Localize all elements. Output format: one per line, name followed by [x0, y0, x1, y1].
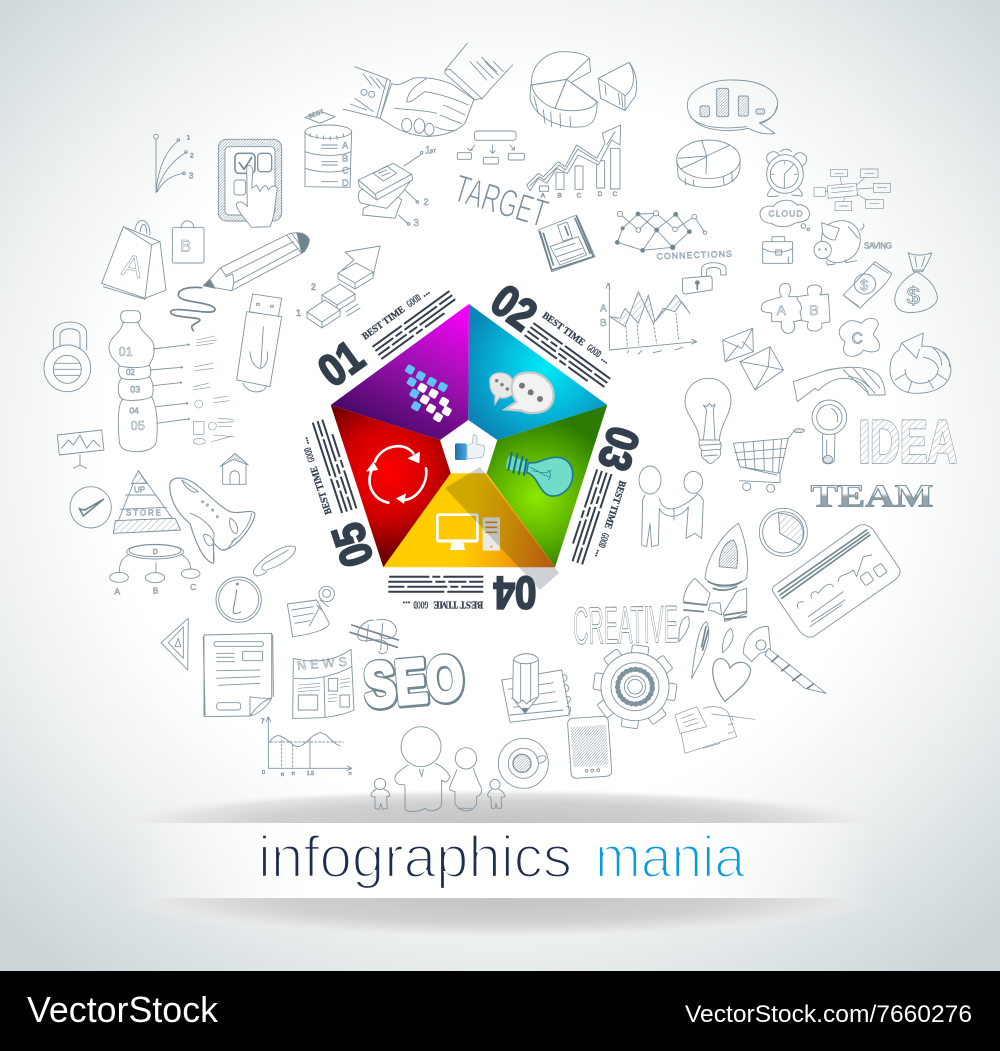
long shadow on segment 04: [445, 467, 559, 590]
sketch: tree diagram: [110, 544, 200, 597]
sketch: cloud label: CLOUD: [768, 209, 803, 219]
sketch: puzzle pieces: B: [809, 302, 819, 318]
sketch: tree diagram: B: [153, 585, 159, 595]
sketch: USB stick: [237, 294, 282, 392]
sketch: notebook with pencil: [502, 654, 571, 722]
sketch: book stack: 1: [425, 144, 431, 156]
sketch: bottle diagram: 03: [130, 385, 140, 395]
sketch: dollar bill: [843, 262, 892, 308]
icon: thumbs up: [455, 435, 485, 460]
sketch: floppy disk: [538, 215, 595, 272]
sketch: data stack: A: [342, 140, 349, 150]
sketch: shopping bag A: [102, 221, 166, 299]
title: infographics mania: mania: [595, 825, 746, 890]
sketch: shopping bag B: [172, 221, 204, 263]
sketch: open lock: [682, 263, 726, 294]
sketch: area line chart: [600, 283, 697, 354]
step 04: number and text: GOOD: [413, 599, 428, 610]
sketch: tablet with touch hand: [218, 139, 282, 227]
sketch: pinned note: [287, 586, 334, 637]
sketches: lower right: [639, 333, 957, 753]
step 03: number and text: GOOD: [596, 531, 611, 549]
sketch: pie icon: [759, 508, 807, 556]
sketch: curved arrow: [793, 367, 885, 402]
step 05: number and text: BEST TIME: [309, 465, 335, 516]
step 03: number and text: BEST TIME: [602, 479, 628, 530]
sketch: padlock: [44, 322, 91, 392]
sketch: pyramid: [113, 471, 181, 533]
step 03: number and text: 03: [588, 421, 650, 477]
sketch: stacked steps with arrow: 2: [311, 282, 316, 292]
sketch: presentation board: [57, 430, 104, 468]
step 01: number and text: GOOD: [405, 292, 423, 310]
sketch: area line chart: B: [600, 318, 607, 329]
sketch: tree diagram: A: [114, 587, 120, 597]
step 05: number and text: GOOD: [302, 446, 318, 463]
sketch: necktie: [743, 627, 826, 693]
sketch: light bulb: [685, 378, 731, 463]
sketch: pencil: [203, 233, 309, 291]
sketch: coffee cup: [498, 738, 548, 788]
sketch: rising arrow bar chart: D: [598, 191, 603, 198]
icon: dot grid: [404, 364, 452, 423]
sketch: family figures: [371, 727, 505, 811]
sketch: small org chart: [457, 131, 524, 164]
step 01: number and text: ...: [419, 286, 432, 300]
sketch: branching curves: 1: [187, 134, 191, 141]
sketch: flat pie chart: [677, 140, 740, 188]
step 03: number and text: [568, 421, 650, 570]
sketch: rocket plane: [170, 478, 255, 563]
title: infographics mania: [258, 825, 746, 890]
sketch: math graph: [261, 716, 352, 778]
sketches: upper left: [44, 134, 309, 468]
sketch: pyramid: STORE: [126, 508, 161, 517]
step 05: number and text: [296, 418, 383, 573]
title ribbon: [125, 823, 875, 898]
sketch: bottle diagram: 05: [131, 419, 145, 433]
sketch: shopping bag B: B: [180, 237, 191, 256]
sketch: document page: [203, 633, 273, 717]
sketch: check mark badge: [70, 487, 111, 528]
sketch: handshake: [343, 43, 513, 136]
sketch: book stack: 2: [423, 197, 429, 207]
sketch: math graph: π: [281, 772, 285, 778]
sketch: cloud label: [760, 200, 810, 231]
step 03: number and text: ...: [592, 549, 605, 560]
sketch: tree diagram: D: [153, 547, 158, 556]
sketch: struck-out dollar: [350, 619, 398, 654]
sketch: SEO outlined word: SEO: [361, 643, 466, 721]
sketch: math graph: n: [349, 771, 352, 777]
step 04: number and text: ...: [402, 599, 410, 610]
sketch: book stack: ST: [430, 149, 436, 154]
sketch: bottle diagram: 04: [129, 405, 139, 415]
sketch: data stack: [305, 109, 352, 188]
sketch: piggy bank: [814, 221, 892, 265]
sketch: alarm clock: [767, 149, 807, 197]
sketches: bottom centre: [350, 595, 682, 811]
sketch: rising arrow bar chart: C: [577, 193, 582, 200]
sketch: newspaper: NEWS: [296, 655, 347, 673]
step 01: number and text: 01: [309, 330, 373, 396]
sketch: math graph: π: [291, 771, 295, 777]
sketch: math graph: 0: [262, 770, 265, 776]
ribbon shadow: top: [160, 791, 839, 823]
sketch: data stack: BEST: [308, 109, 325, 120]
sketch: rising arrow bar chart: A: [541, 193, 546, 200]
sketches: top centre: [305, 43, 637, 272]
sketch: rising arrow bar chart: [527, 125, 621, 200]
sketch: data stack: D: [342, 178, 349, 188]
sketch: piggy bank: SAVING: [864, 241, 892, 250]
sketch: credit card: [773, 525, 900, 637]
sketch: stacked steps with arrow: 1: [296, 308, 301, 318]
icon: cycle arrows: [366, 446, 426, 504]
step 05: number and text: 05: [321, 517, 383, 573]
sketch: shopping cart: [733, 429, 804, 492]
sketch: tree diagram: C: [190, 582, 196, 592]
sketch: gear: [588, 640, 682, 733]
step 02: number and text: [482, 274, 621, 391]
step 01: number and text: BEST TIME: [360, 304, 407, 342]
step 02: number and text: GOOD: [584, 343, 603, 360]
sketch: TEAM shaded word: TEAM: [811, 479, 933, 514]
sketch: IDEA hatched word: IDEA: [859, 409, 957, 476]
sketch: house: [220, 453, 248, 484]
segment 04: yellow: [383, 473, 555, 567]
step 04: number and text: BEST TIME: [433, 599, 483, 610]
sketch: puzzle pieces: C: [852, 330, 863, 347]
text: CREATIVE: [573, 595, 679, 656]
icon: light bulb: [506, 453, 573, 496]
ribbon shadow: bottom: [184, 898, 816, 934]
sketch: bottle diagram: [109, 311, 234, 452]
segment 02: blue: [468, 304, 607, 440]
sketches: lower left: [70, 453, 354, 778]
sketch: rising arrow bar chart: B: [557, 193, 562, 200]
sketch: connections network: [615, 211, 732, 261]
sketch: math graph: 1.5: [307, 771, 314, 777]
sketch: rocket: [679, 523, 748, 678]
sketch: IDEA hatched word: IDEA: [859, 409, 957, 476]
sketch: bottle diagram: 02: [126, 368, 135, 377]
sketch: data stack: C: [342, 165, 349, 175]
sketch: paperclip: [254, 546, 295, 576]
sketch: magnifying glass: [812, 400, 847, 464]
sketch: SEO outlined word: SEO: [362, 644, 467, 721]
sketch: pyramid: UP: [134, 486, 145, 495]
footer: VectorStock logo: VectorStock: [27, 989, 219, 1030]
sketch: folder, notes and pen: [675, 707, 755, 753]
step 02: number and text: 02: [482, 274, 546, 340]
sketch: IDEA hatched word: [859, 409, 957, 476]
footer bar: [0, 971, 1000, 1051]
sketch: book stack: 3: [413, 218, 419, 229]
sketch: puzzle pieces: A: [777, 302, 787, 318]
sketch: heart: [713, 659, 751, 702]
step 02: number and text: BEST TIME: [540, 310, 587, 349]
sketch: TARGET word: TARGET: [449, 167, 553, 236]
icon: speech bubbles: [490, 373, 554, 413]
sketch: area line chart: A: [600, 304, 607, 315]
central pentagon: [331, 304, 607, 590]
footer: image URL: VectorStock.com/7660276: [685, 1001, 972, 1028]
sketch: branching curves: 2: [190, 152, 194, 159]
sketches: upper right: [600, 80, 937, 390]
sketch: math graph: 7: [261, 716, 265, 725]
title: infographics mania: infographics: [258, 825, 572, 890]
sketch: puzzle pieces: [761, 283, 879, 356]
sketch: triangle ruler: [161, 618, 188, 670]
step 04: number and text: [388, 567, 536, 618]
sketch: circular arrow: [890, 333, 951, 393]
sketch: info circle: [216, 577, 261, 622]
icon: desktop computer: [436, 513, 500, 551]
step 04: number and text: 04: [494, 567, 536, 618]
sketch: newspaper: [293, 649, 354, 718]
sketch: smartphone: [567, 716, 612, 779]
sketch: 3D pie chart: [530, 52, 637, 127]
sketch: dollar bill: $: [860, 278, 868, 294]
step 02: number and text: ...: [599, 353, 612, 367]
sketch: two figures shaking hands: [639, 466, 703, 547]
sketch: scribble line: [171, 287, 215, 331]
sketch: book stack: [358, 144, 436, 229]
sketch: rising arrow bar chart: C: [613, 191, 618, 198]
sketch: data stack: B: [342, 154, 348, 164]
sketch: envelopes: [723, 328, 783, 390]
sketch: branching curves: 3: [189, 171, 194, 181]
sketch: money bag: $: [907, 283, 920, 310]
segment 03: green: [487, 405, 607, 567]
sketch: money bag: [895, 253, 937, 313]
step 01: number and text: [309, 277, 458, 396]
sketch: speech bubble with bars: [687, 80, 778, 134]
sketch: stacked steps with arrow: [296, 246, 380, 328]
sketch: connections network: CONNECTIONS: [656, 249, 732, 261]
step 05: number and text: ...: [299, 435, 312, 446]
sketch: mind map: [814, 169, 891, 211]
sketch: shopping bag A: A: [119, 249, 146, 285]
sketch: branching curves: [154, 134, 194, 193]
segment 01: purple: [331, 304, 469, 440]
segment 05: red: [331, 405, 451, 567]
sketch: bottle diagram: 01: [119, 345, 133, 359]
sketch: briefcase: [763, 237, 793, 263]
